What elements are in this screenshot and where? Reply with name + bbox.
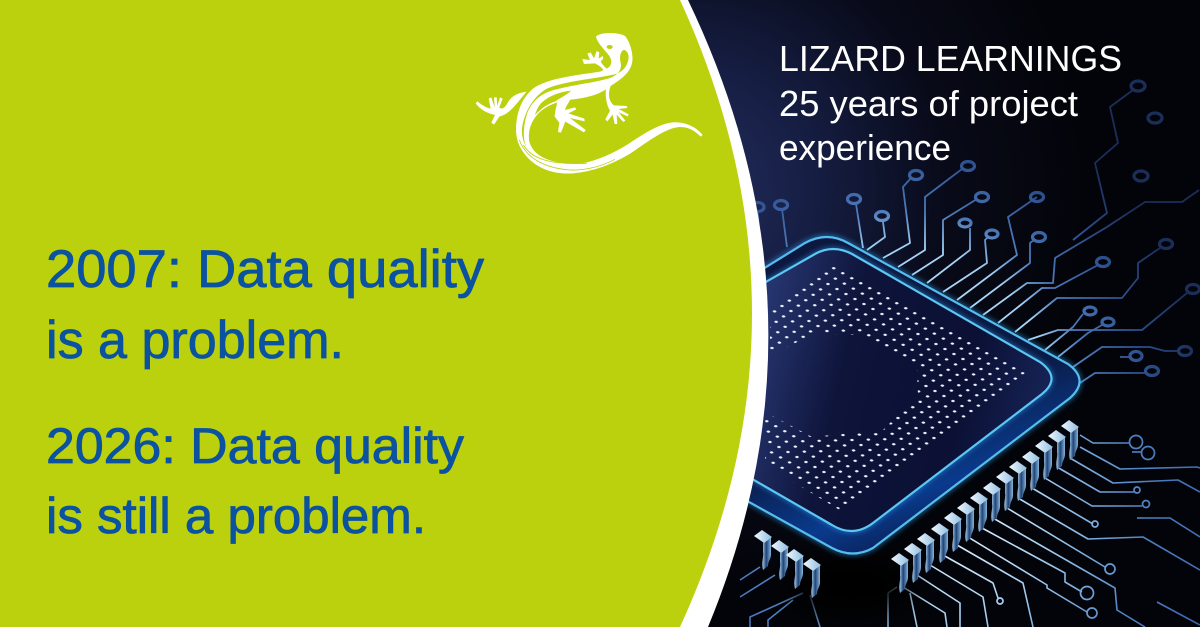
circuit rings: lower bbox=[997, 436, 1154, 618]
lizard head, body and tail bbox=[516, 33, 703, 173]
2007 statement line two: is a problem. bbox=[46, 311, 344, 370]
subheading line two: experience bbox=[779, 127, 951, 168]
chip shadow bbox=[788, 555, 912, 615]
lizard hip marking bbox=[535, 91, 571, 115]
lizard logo bbox=[476, 33, 703, 173]
lizard back stripe bbox=[522, 50, 629, 147]
dark circuit background bbox=[680, 0, 1200, 627]
chip outer glow bbox=[740, 237, 1080, 554]
main message bbox=[46, 240, 484, 544]
2026 statement line one: 2026: Data quality bbox=[46, 418, 464, 474]
subheading line one: 25 years of project bbox=[779, 83, 1078, 124]
heading: Lizard Learnings: LIZARD LEARNINGS bbox=[779, 38, 1122, 79]
lizard eye bbox=[607, 45, 613, 49]
chip dot matrix bbox=[765, 263, 1025, 512]
right panel heading bbox=[779, 38, 1122, 168]
chip inner face bbox=[740, 249, 1052, 531]
circuit traces: upper bbox=[758, 90, 1199, 383]
lizard front right leg bbox=[605, 86, 629, 124]
chip inner glow bbox=[740, 249, 1052, 531]
lizard front left leg bbox=[582, 51, 608, 73]
lizard rear right leg bbox=[555, 93, 586, 133]
microchip bbox=[740, 237, 1080, 554]
circuit traces: lower bbox=[740, 435, 1200, 627]
lizard rear foot bbox=[476, 92, 527, 125]
lime green panel bbox=[0, 0, 752, 627]
white curved divider bbox=[670, 0, 768, 627]
2026 statement line two: is still a problem. bbox=[46, 488, 426, 544]
circuit rings: upper bbox=[752, 81, 1200, 376]
lizard tail lines bbox=[519, 140, 615, 170]
2007 statement line one: 2007: Data quality bbox=[46, 240, 484, 299]
chip outer band bbox=[740, 237, 1080, 554]
chip pins bbox=[754, 420, 1079, 598]
